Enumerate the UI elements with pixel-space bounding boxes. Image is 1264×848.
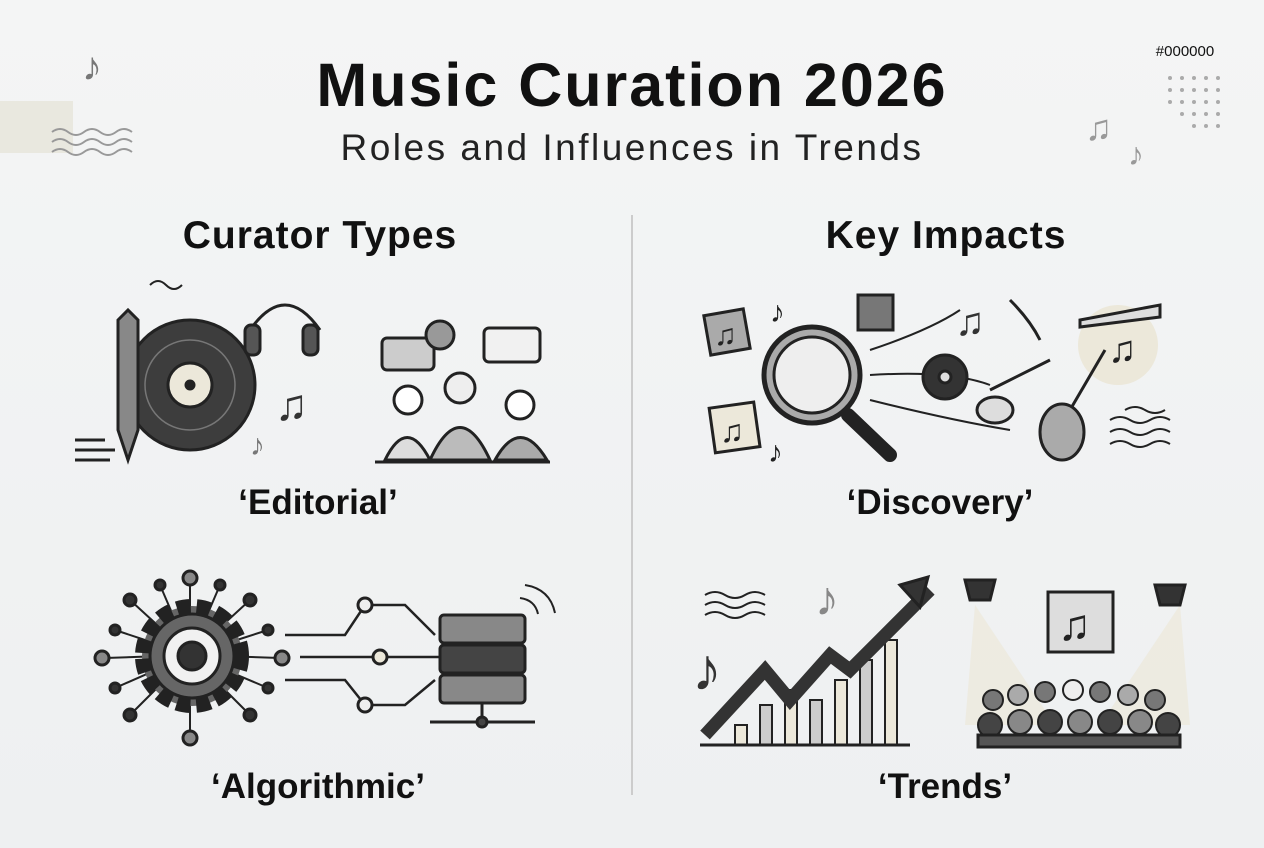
icon: discovery magnifier: ♪ [768, 436, 783, 469]
heading: curator types: Curator Types [183, 214, 457, 257]
label: editorial: ‘Editorial’ [238, 483, 398, 522]
icon: discovery magnifier: ♫ [1108, 329, 1136, 371]
icon: editorial vinyl + pen + headphones + people [75, 281, 550, 462]
icon: discovery magnifier: ♫ [720, 413, 744, 449]
label: discovery: ‘Discovery’ [847, 483, 1033, 522]
label: trends: ‘Trends’ [878, 767, 1012, 806]
decorative top-left: ♪ [82, 45, 102, 89]
icon: editorial vinyl + pen + headphones + people: ♫ [275, 381, 308, 430]
decorative top-right: ♪ [1128, 136, 1144, 172]
decorative top-left [0, 45, 132, 155]
title: Music Curation 2026 [316, 51, 948, 119]
icon: discovery magnifier: ♫ [955, 300, 985, 344]
icon: trends chart and crowd [692, 573, 1190, 747]
decorative top-right: ♫ [1085, 107, 1112, 148]
subtitle: Roles and Influences in Trends [340, 127, 924, 168]
icon: discovery magnifier: ♫ [714, 319, 736, 352]
icon: discovery magnifier: ♪ [770, 296, 785, 329]
icon: trends chart and crowd: ♪ [692, 636, 722, 703]
label: algorithmic: ‘Algorithmic’ [211, 767, 425, 806]
heading: key impacts: Key Impacts [826, 214, 1066, 257]
icon: editorial vinyl + pen + headphones + people: ♪ [250, 429, 265, 462]
decorative top-right [1085, 76, 1220, 172]
icon: discovery magnifier [704, 295, 1170, 469]
icon: algorithmic gear + network + server [95, 571, 555, 745]
icon: trends chart and crowd: ♫ [1058, 601, 1091, 650]
icon: trends chart and crowd: ♪ [815, 573, 839, 626]
divider [631, 215, 633, 795]
hex code label: #000000 [1156, 43, 1214, 60]
